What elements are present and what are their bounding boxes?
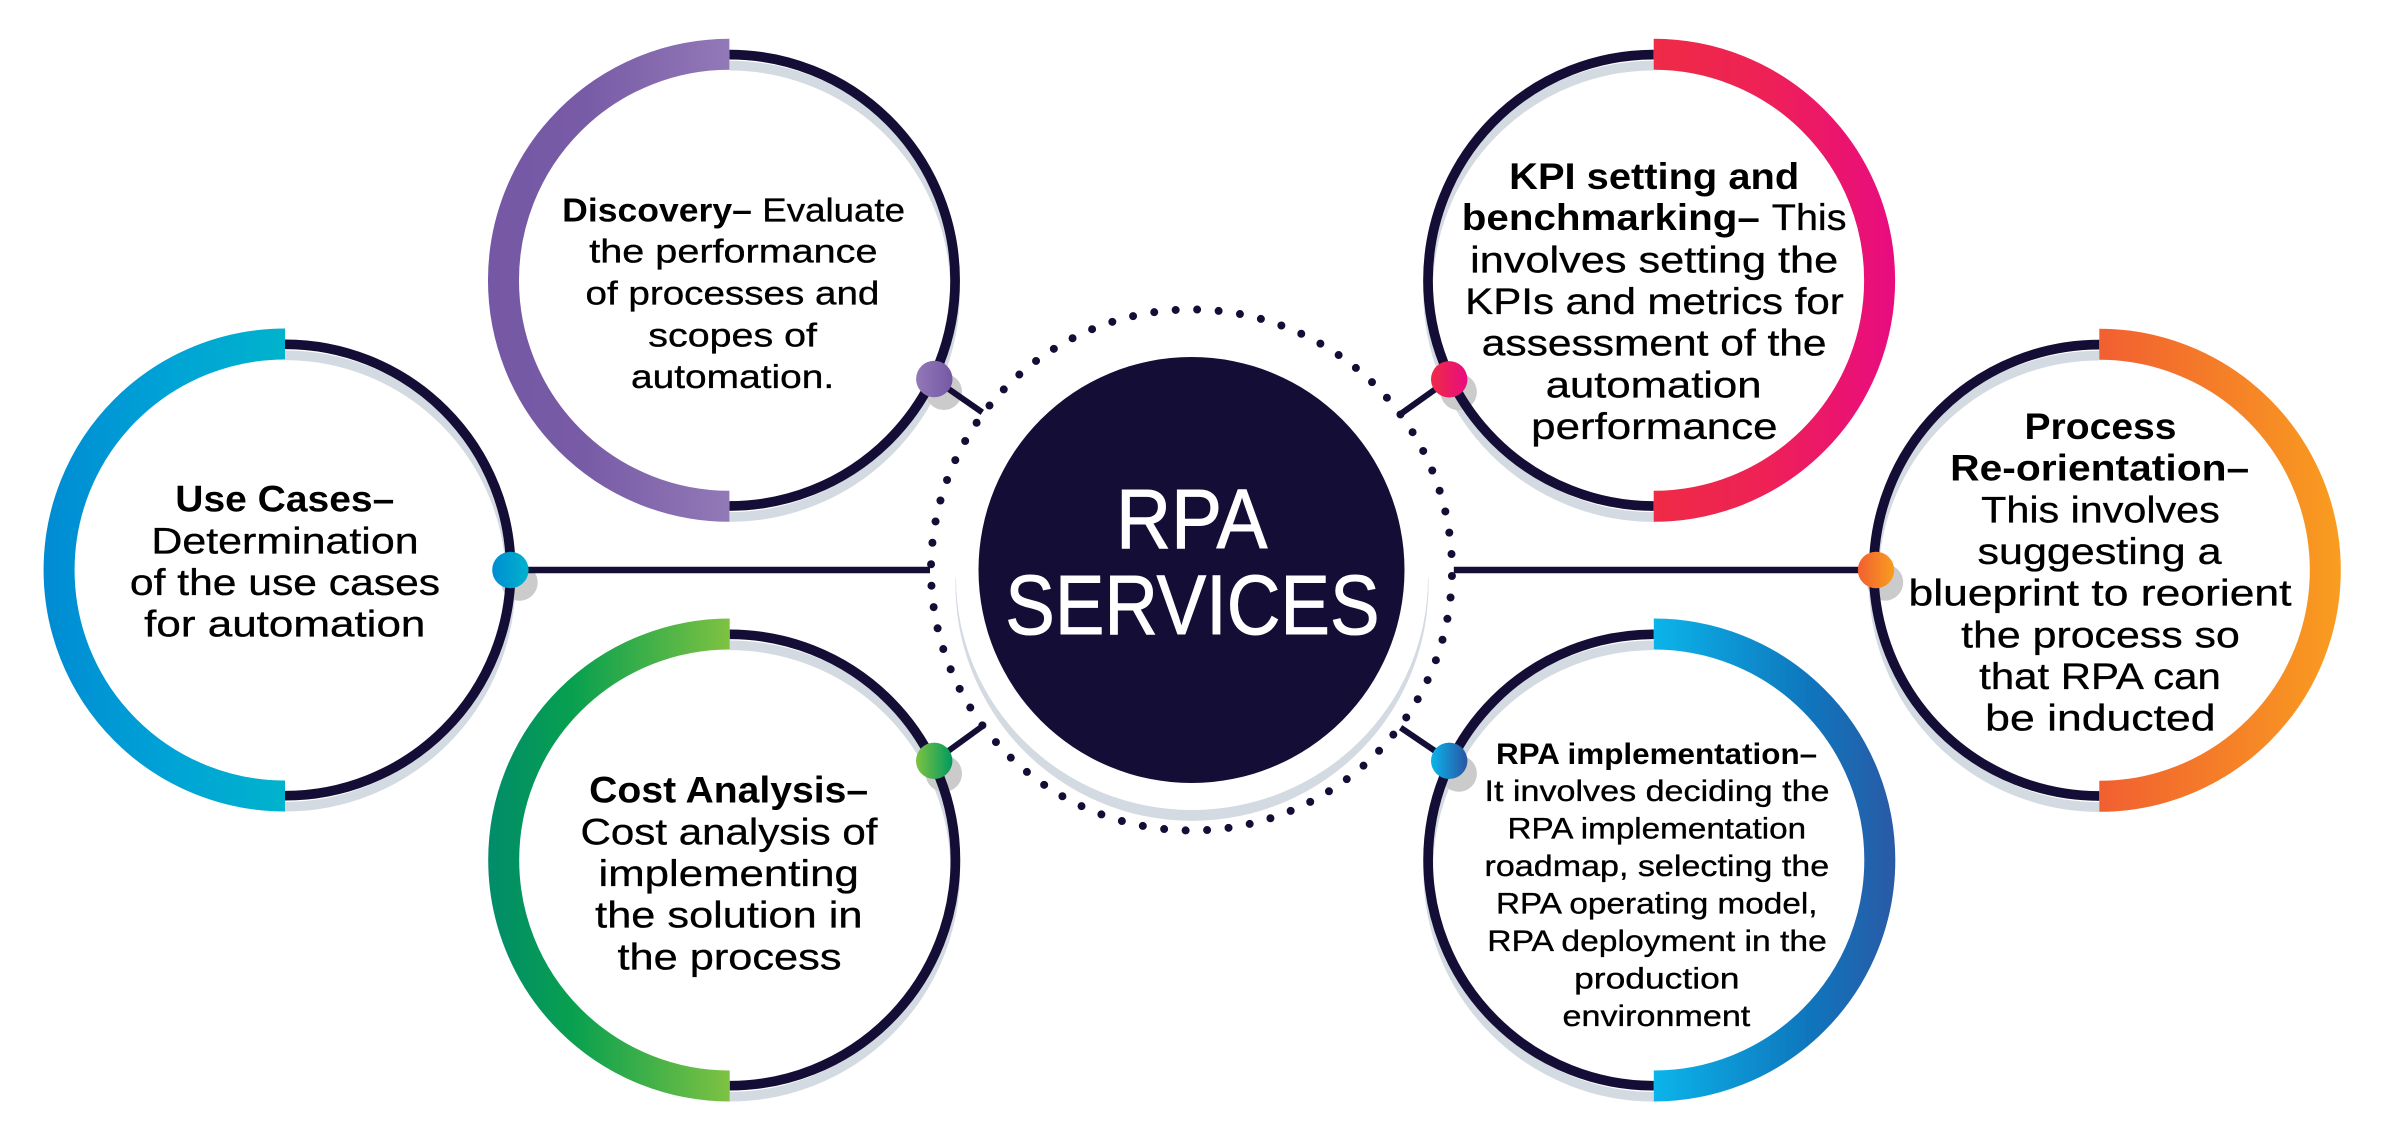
text: RPA implementation: RPA implementation– bbox=[1496, 738, 1817, 771]
node: process re-orientation bbox=[1858, 552, 1894, 588]
text: discovery: Evaluate bbox=[762, 191, 905, 228]
hub title bbox=[1005, 472, 1380, 652]
text: discovery: of processes and bbox=[586, 274, 879, 311]
text: KPI: assessment of the bbox=[1482, 323, 1826, 364]
node: KPI bbox=[1431, 361, 1467, 397]
panel: cost analysis bbox=[504, 634, 982, 1097]
connector: use cases to center bbox=[525, 567, 930, 573]
text: RPA implementation: RPA implementation bbox=[1508, 813, 1806, 846]
panel: use cases bbox=[59, 344, 930, 807]
hub title: RPA bbox=[1116, 472, 1267, 566]
connector: discovery to center bbox=[940, 383, 982, 412]
ring: KPI bbox=[1428, 54, 1880, 517]
text: KPI: involves setting the bbox=[1470, 239, 1838, 280]
ring: cost analysis bbox=[504, 634, 962, 1097]
text: RPA implementation: It involves deciding the bbox=[1484, 775, 1830, 808]
connector: KPI to center bbox=[1402, 383, 1444, 413]
text: discovery: the performance bbox=[589, 232, 878, 270]
text: use cases: of the use cases bbox=[130, 562, 440, 603]
panel: discovery bbox=[503, 54, 982, 517]
connector: RPA implementation to center bbox=[1401, 728, 1444, 757]
hub shadow crescent bbox=[956, 578, 1429, 821]
text: process re-orientation bbox=[1908, 406, 2292, 739]
text: KPI: automation bbox=[1546, 364, 1762, 405]
text: cost analysis: Cost Analysis– bbox=[589, 770, 868, 811]
dotted ring bbox=[931, 310, 1452, 830]
node: cost analysis bbox=[916, 743, 952, 779]
node: use cases bbox=[492, 552, 529, 588]
text: process re-orientation: be inducted bbox=[1985, 698, 2216, 739]
text: process re-orientation: Process bbox=[2024, 406, 2176, 447]
text: RPA implementation: RPA operating model, bbox=[1496, 888, 1818, 920]
text: KPI: benchmarking– bbox=[1462, 197, 1760, 238]
text: RPA implementation: production bbox=[1574, 963, 1740, 996]
text: process re-orientation: This involves bbox=[1981, 489, 2220, 530]
text: RPA implementation: roadmap, selecting the bbox=[1484, 850, 1829, 883]
text: discovery: automation. bbox=[631, 358, 834, 395]
hub title: SERVICES bbox=[1005, 558, 1380, 652]
text: use cases: Use Cases– bbox=[175, 479, 394, 520]
text: cost analysis: implementing bbox=[598, 853, 859, 894]
connector: cost analysis to center bbox=[940, 726, 982, 757]
center hub: RPA services bbox=[931, 310, 1452, 830]
text: KPI: This bbox=[1772, 197, 1846, 238]
text: process re-orientation: Re-orientation– bbox=[1950, 448, 2249, 489]
text: cost analysis: the process bbox=[618, 936, 842, 977]
text: RPA implementation: RPA deployment in the bbox=[1487, 925, 1827, 958]
panel: process re-orientation bbox=[1454, 344, 2325, 807]
text: process re-orientation: that RPA can bbox=[1979, 656, 2221, 697]
text: KPI: KPI setting and bbox=[1509, 156, 1799, 197]
hub disc bbox=[978, 357, 1404, 783]
panel: KPI setting and benchmarking bbox=[1402, 54, 1880, 517]
text: KPI: performance bbox=[1531, 406, 1778, 447]
text: process re-orientation: suggesting a bbox=[1978, 531, 2222, 572]
text: discovery: Discovery– bbox=[562, 191, 752, 228]
connector: process re-orientation to center bbox=[1454, 567, 1860, 573]
node: discovery bbox=[916, 361, 952, 397]
text: cost analysis: Cost analysis of bbox=[580, 811, 878, 852]
panel: RPA implementation bbox=[1401, 634, 1880, 1097]
text: cost analysis: the solution in bbox=[595, 895, 862, 936]
ring: RPA implementation bbox=[1428, 634, 1880, 1097]
ring: use cases bbox=[59, 344, 538, 807]
text: cost analysis bbox=[580, 770, 878, 977]
text: KPI bbox=[1462, 156, 1846, 447]
text: discovery: scopes of bbox=[648, 316, 818, 353]
ring: process re-orientation bbox=[1867, 344, 2325, 807]
node: RPA implementation bbox=[1431, 743, 1467, 779]
text: use cases: for automation bbox=[144, 604, 425, 645]
text: process re-orientation: blueprint to reorient bbox=[1908, 573, 2292, 614]
text: process re-orientation: the process so bbox=[1961, 614, 2240, 655]
text: use cases: Determination bbox=[151, 520, 419, 561]
ring: discovery bbox=[503, 54, 962, 517]
text: use cases bbox=[130, 479, 440, 645]
text: RPA implementation bbox=[1484, 738, 1830, 1033]
text: KPI: KPIs and metrics for bbox=[1465, 281, 1844, 322]
text: discovery bbox=[562, 191, 905, 395]
text: RPA implementation: environment bbox=[1562, 1000, 1751, 1033]
